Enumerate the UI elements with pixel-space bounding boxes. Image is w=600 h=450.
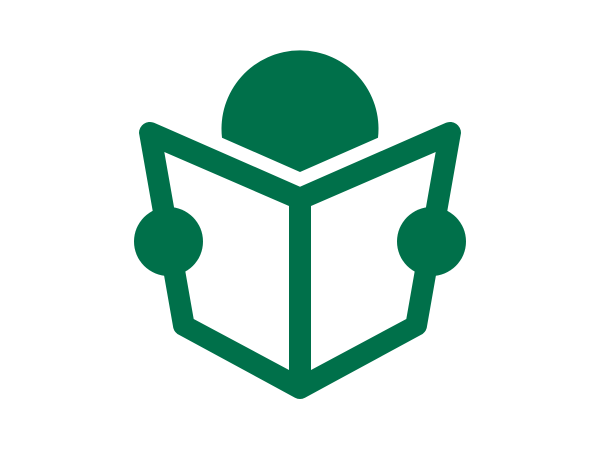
icon: open book bbox=[139, 122, 461, 399]
icon: right hand bbox=[397, 207, 466, 276]
icon: reader head bbox=[222, 50, 378, 172]
icon: left hand bbox=[134, 207, 203, 276]
